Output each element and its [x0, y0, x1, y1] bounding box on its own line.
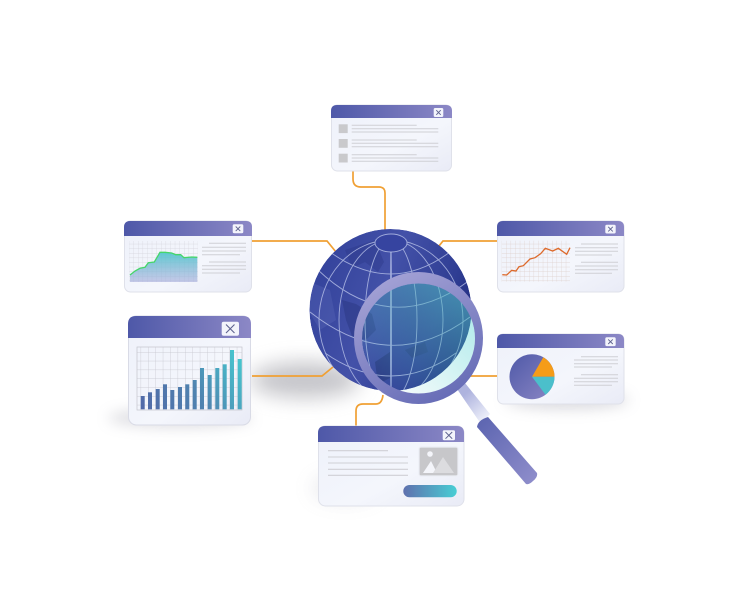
area chart: [129, 241, 198, 282]
bars: [141, 350, 242, 409]
list icons: [339, 124, 348, 162]
handle grip: [477, 417, 537, 484]
connector lines: [252, 168, 497, 426]
text lines: [202, 243, 246, 273]
close button: [605, 337, 616, 346]
window: area chart (left upper): [124, 221, 252, 292]
close button: [434, 108, 443, 117]
text lines: [574, 357, 618, 385]
window: line chart (right upper): [497, 221, 624, 292]
close button: [222, 322, 239, 336]
image placeholder icon: [419, 447, 458, 476]
lens ring: [354, 272, 483, 404]
pie chart: [510, 354, 554, 399]
window: bar chart (left lower): [128, 316, 251, 425]
list text lines: [352, 125, 438, 161]
handle shaft: [457, 383, 490, 424]
lens glass: [362, 284, 475, 394]
globe: [308, 229, 472, 400]
window: image and button (bottom): [318, 426, 464, 506]
close button: [443, 430, 455, 440]
window: pie chart (right lower): [497, 334, 624, 404]
magnifying glass: [354, 272, 538, 484]
text lines: [575, 244, 618, 273]
close button: [605, 225, 616, 234]
line chart: [502, 241, 570, 282]
shadows beneath objects: [108, 362, 629, 500]
window: text list (top): [331, 105, 452, 171]
button: [403, 485, 457, 497]
grid: [137, 347, 242, 410]
close button: [233, 224, 243, 233]
text lines: [328, 451, 408, 475]
